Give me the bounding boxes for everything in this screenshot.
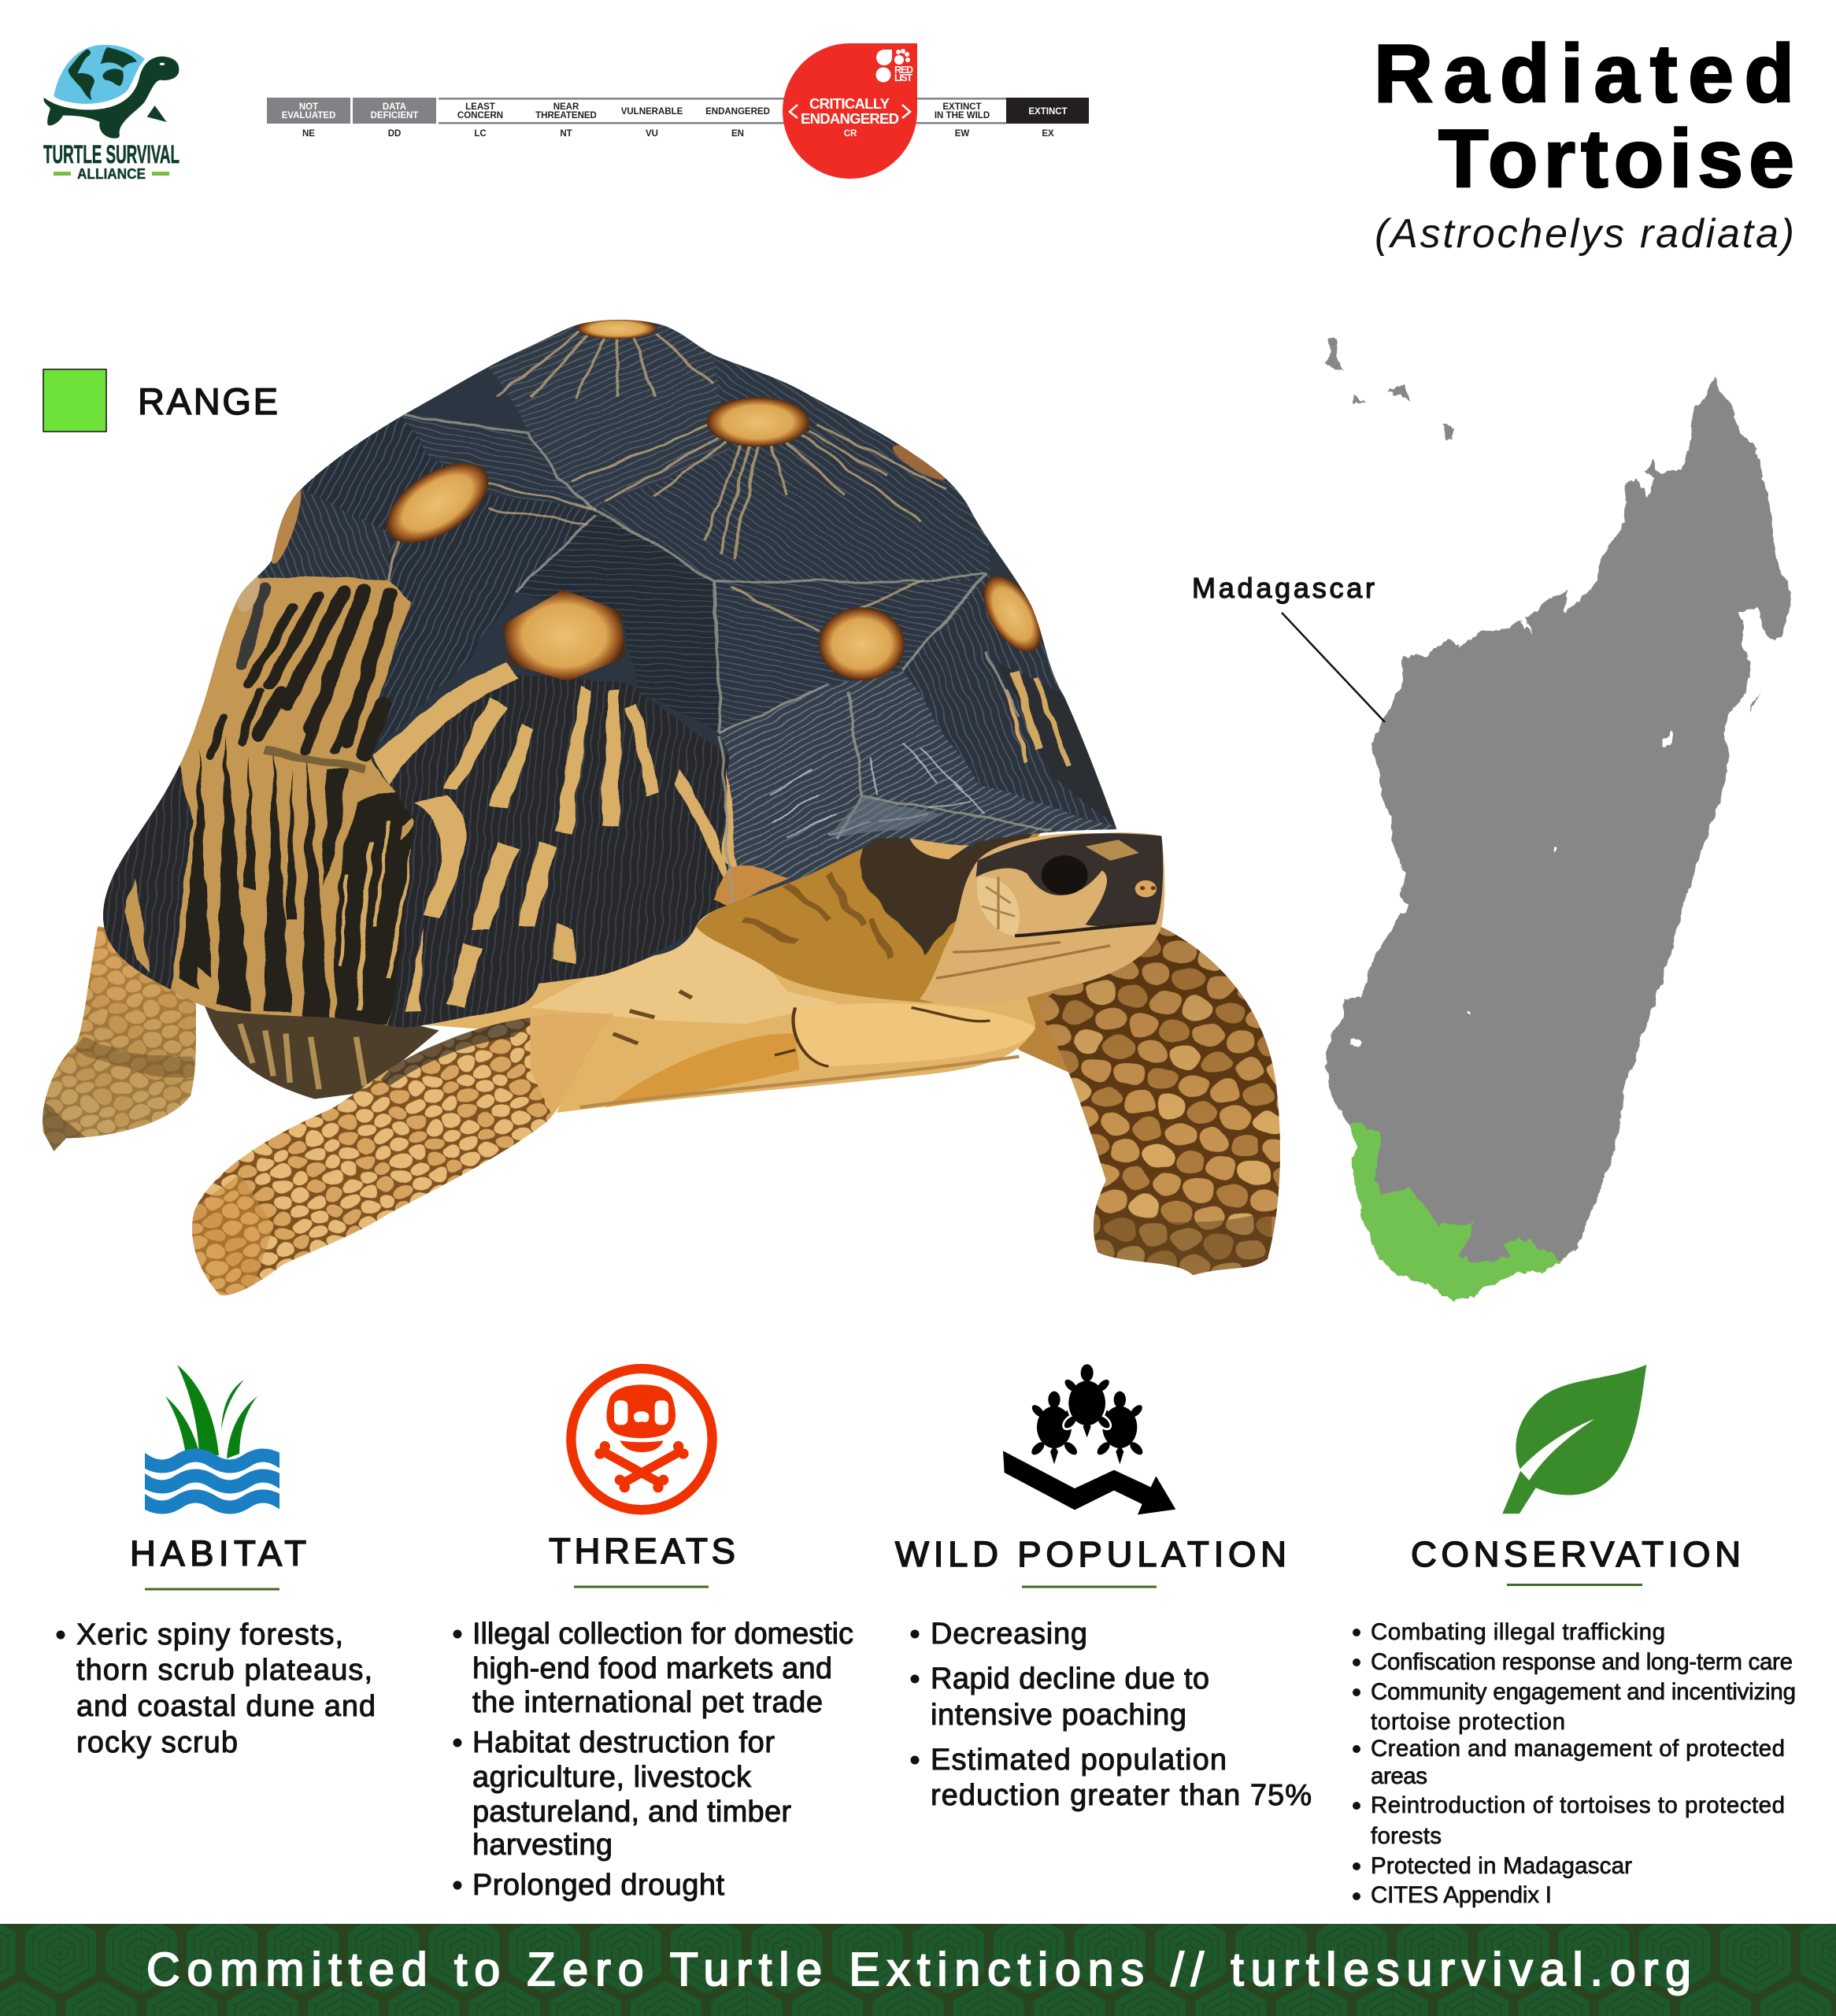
wild population bullets: Rapid decline due to xyxy=(931,1662,1209,1695)
IUCN red list status bar: RED xyxy=(894,65,913,76)
right rim stripes xyxy=(998,662,1115,823)
right front leg xyxy=(1018,926,1280,1276)
threats bullets: harvesting xyxy=(472,1829,613,1862)
IUCN red list status bar: IN THE WILD xyxy=(935,111,990,120)
panel: conservation xyxy=(1353,1534,1796,1908)
radial lines xyxy=(390,332,945,632)
IUCN red list status bar xyxy=(267,43,1089,179)
conservation bullets: Protected in Madagascar xyxy=(1371,1853,1632,1879)
range area in green xyxy=(1350,1121,1561,1299)
central stripes zone xyxy=(368,672,729,1030)
icon: conservation leaf xyxy=(1502,1365,1646,1514)
Madagascar label and leader line xyxy=(1192,572,1385,722)
title: Tortoise xyxy=(1438,113,1794,205)
icon: threats skull and crossbones xyxy=(571,1369,713,1510)
conservation bullets xyxy=(1353,1619,1796,1908)
conservation bullets: Combating illegal trafficking xyxy=(1371,1619,1665,1645)
rear left leg xyxy=(43,926,196,1151)
logo: Turtle Survival Alliance xyxy=(43,45,180,182)
map of Madagascar xyxy=(1326,339,1792,1299)
IUCN red list status bar: EVALUATED xyxy=(282,111,335,120)
IUCN red list status bar: EN xyxy=(731,129,744,139)
IUCN red list status bar: CONCERN xyxy=(457,111,503,120)
conservation bullets: tortoise protection xyxy=(1371,1709,1565,1735)
logo: Turtle Survival Alliance: ALLIANCE xyxy=(77,166,146,182)
head xyxy=(920,832,1164,1005)
bright highlights on front scutes xyxy=(771,743,986,838)
shell xyxy=(91,313,1127,1037)
IUCN red list status bar: CRITICALLY xyxy=(809,95,890,112)
Madagascar label and leader line: Madagascar xyxy=(1192,572,1375,604)
IUCN red list status bar: NEAR xyxy=(553,102,579,112)
IUCN red list status bar: THREATENED xyxy=(535,111,597,120)
conservation bullets: Creation and management of protected xyxy=(1371,1736,1785,1762)
IUCN red list status bar: CR xyxy=(844,129,857,139)
IUCN red list status bar: VULNERABLE xyxy=(621,107,683,117)
threats bullets: high-end food markets and xyxy=(472,1652,832,1685)
upper side stripes xyxy=(211,587,390,756)
rear under shell xyxy=(203,1001,439,1099)
IUCN red list status bar: NOT xyxy=(299,102,318,112)
threats bullets: Illegal collection for domestic xyxy=(472,1618,853,1651)
threats bullets: Prolonged drought xyxy=(472,1869,724,1902)
heading: threats: THREATS xyxy=(549,1531,735,1571)
scute lines xyxy=(406,416,1052,906)
heading: habitat: HABITAT xyxy=(130,1533,306,1573)
wild population bullets: reduction greater than 75% xyxy=(931,1779,1312,1812)
yellow side marginal zone xyxy=(116,576,452,1037)
IUCN red list status bar: EXTINCT xyxy=(1028,107,1068,117)
conservation bullets: Confiscation response and long-term care xyxy=(1371,1649,1793,1675)
logo: Turtle Survival Alliance: TURTLE SURVIVAL xyxy=(43,140,180,169)
IUCN red list status bar: LEAST xyxy=(465,102,495,112)
IUCN red list status bar: DD xyxy=(388,129,401,139)
threats bullets: agriculture, livestock xyxy=(472,1761,752,1794)
body skin xyxy=(414,847,1035,1113)
panel: threats xyxy=(453,1531,853,1902)
habitat bullets: thorn scrub plateaus, xyxy=(76,1654,372,1687)
IUCN red list status bar: NT xyxy=(560,129,572,139)
heading: conservation: CONSERVATION xyxy=(1411,1534,1741,1574)
Comoros islands xyxy=(1326,339,1454,442)
footer banner xyxy=(0,1924,1836,2016)
IUCN red list status bar: LIST xyxy=(894,72,912,83)
wild population bullets xyxy=(910,1618,1312,1812)
Sainte-Marie island xyxy=(1749,691,1761,715)
icon: declining turtle population xyxy=(1003,1364,1175,1514)
lakes xyxy=(1351,732,1672,1047)
IUCN red list status bar: LC xyxy=(474,129,487,139)
orange scute spots xyxy=(233,318,1053,681)
scute texture xyxy=(91,313,1127,1037)
threats bullets: Habitat destruction for xyxy=(472,1726,775,1759)
Madagascar island xyxy=(1326,376,1792,1299)
conservation bullets: forests xyxy=(1371,1823,1442,1849)
conservation bullets: CITES Appendix I xyxy=(1371,1882,1552,1908)
wild population bullets: Estimated population xyxy=(931,1744,1227,1777)
decline arrow xyxy=(1003,1451,1175,1514)
conservation bullets: Reintroduction of tortoises to protected xyxy=(1371,1792,1785,1818)
habitat bullets: rocky scrub xyxy=(76,1726,238,1759)
threats bullets xyxy=(453,1618,853,1902)
lower marginal dark wedges xyxy=(124,736,447,1024)
habitat bullets: and coastal dune and xyxy=(76,1690,376,1723)
left turtle xyxy=(1029,1392,1079,1464)
threats bullets: pastureland, and timber xyxy=(472,1796,791,1829)
IUCN red list status bar: ENDANGERED xyxy=(801,110,899,127)
neck xyxy=(696,828,1044,1003)
range legend: RANGE xyxy=(138,380,278,422)
front left leg xyxy=(192,1013,613,1295)
scientific name: (Astrochelys radiata) xyxy=(1375,211,1794,257)
shell front notch xyxy=(909,839,969,859)
right turtle xyxy=(1095,1392,1145,1464)
title xyxy=(1374,28,1794,205)
conservation bullets: areas xyxy=(1371,1763,1427,1789)
conservation bullets: Community engagement and incentivizing xyxy=(1371,1679,1796,1705)
range legend xyxy=(43,369,278,432)
threats bullets: the international pet trade xyxy=(472,1686,823,1719)
centre turtle xyxy=(1062,1364,1112,1437)
IUCN red list status bar: EX xyxy=(1042,129,1054,139)
IUCN red list status bar: EW xyxy=(955,129,969,139)
IUCN red list status bar: ENDANGERED xyxy=(705,107,770,117)
IUCN red list status bar: VU xyxy=(646,129,658,139)
icon: habitat grass and water xyxy=(145,1365,279,1514)
panel: habitat xyxy=(57,1533,376,1759)
tortoise illustration xyxy=(33,313,1293,1305)
wild population bullets: intensive poaching xyxy=(931,1699,1186,1732)
heading: wild population: WILD POPULATION xyxy=(895,1534,1286,1574)
wild population bullets: Decreasing xyxy=(931,1618,1087,1651)
IUCN red list status bar: DATA xyxy=(383,102,406,112)
IUCN red list status bar: DEFICIENT xyxy=(371,111,418,120)
panel: wild population xyxy=(895,1534,1312,1812)
footer banner: Committed to Zero Turtle Extinctions // turtlesurvival.org xyxy=(146,1944,1691,1996)
thin yellow stripes in dark block xyxy=(342,821,413,1011)
habitat bullets: Xeric spiny forests, xyxy=(76,1618,343,1651)
IUCN red list status bar: EXTINCT xyxy=(942,102,982,112)
IUCN red list status bar: NE xyxy=(302,129,315,139)
title: Radiated xyxy=(1374,28,1794,120)
habitat bullets xyxy=(57,1618,376,1759)
